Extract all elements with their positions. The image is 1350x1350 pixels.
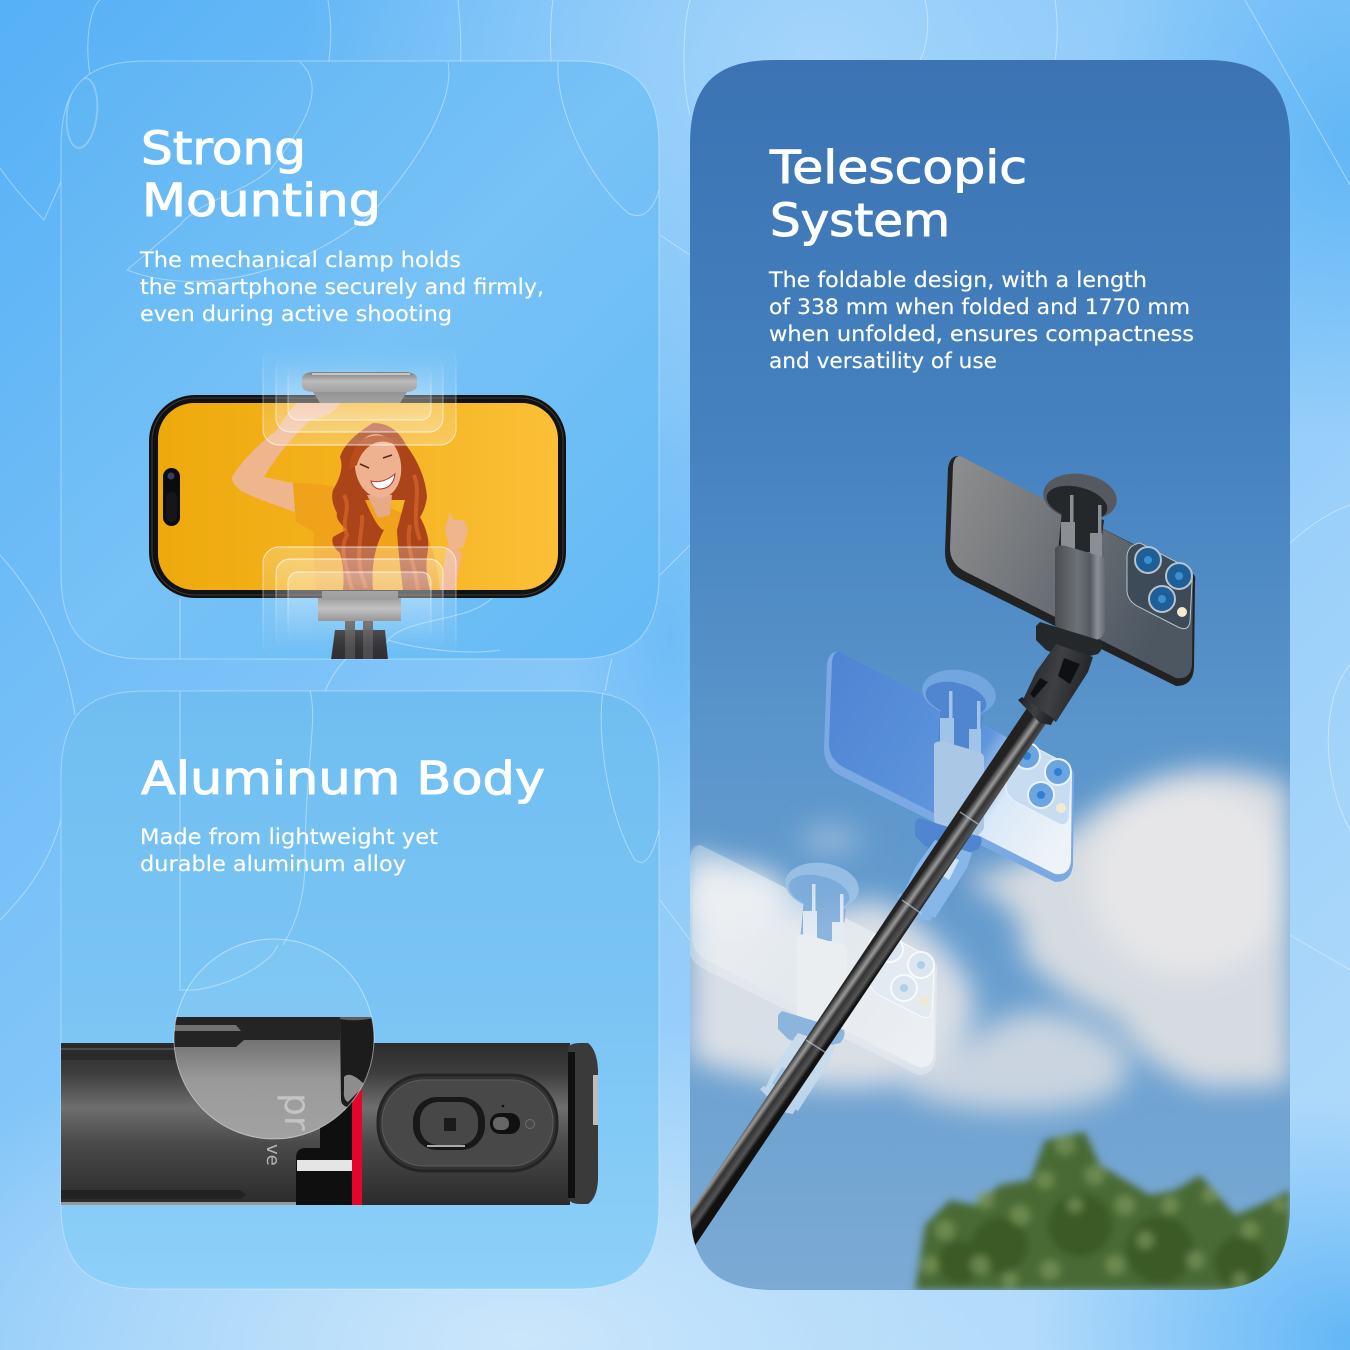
ghost phone: blue, middle position [824,652,1074,921]
description: aluminum body [140,825,438,876]
heading: Strong Mounting [141,122,381,227]
description: strong mounting [139,248,544,326]
description: aluminum body: Made from lightweight yet [140,825,438,849]
power switch [490,1105,534,1134]
handle end cap [568,1043,598,1204]
clouds [680,769,1290,1111]
telescopic pole [690,708,1047,1250]
main phone on clamp [945,456,1195,725]
shutter button [413,1097,485,1150]
heading: Aluminum Body: Aluminum Body [141,752,545,805]
brand text remainder: ve [262,1144,283,1166]
panel: aluminum body [60,691,659,1289]
blurred tree [915,1132,1290,1290]
dynamic island [163,468,180,526]
sky background [690,60,1290,1290]
illustration: phone in clamp [149,345,566,660]
description: telescopic system: of 338 mm when folded and 1770 mm [769,295,1190,319]
description: telescopic system: The foldable design, with a length [768,268,1147,292]
heading: Strong Mounting: Strong [141,122,306,175]
magnifier loupe [170,939,374,1145]
photo: dancing woman [232,403,468,590]
smartphone [149,395,566,598]
heading: Strong Mounting: Mounting [142,174,381,227]
bottom clamp plate [322,591,398,600]
heading: Telescopic System: System [770,194,950,247]
magnifier loupe: pr [276,1093,317,1131]
description: telescopic system: and versatility of use [769,349,997,373]
panel: strong mounting [61,61,659,660]
heading: Telescopic System: Telescopic [769,141,1027,194]
control panel [378,1075,557,1171]
card line pattern [63,62,659,659]
red stripe [352,1090,362,1205]
description: strong mounting: the smartphone securely and firmly, [140,275,544,299]
background line pattern [0,0,1350,970]
top clamp disc [302,372,417,403]
illustration: selfie stick handle [60,939,598,1205]
phone mount stem [318,598,401,660]
description: telescopic system: when unfolded, ensures compactness [769,322,1194,346]
heading: Telescopic System [769,141,1027,247]
description: aluminum body: durable aluminum alloy [140,852,406,876]
rear slot with white strip [296,1100,354,1205]
card line pattern [180,691,659,990]
panel: telescopic system [680,60,1290,1290]
description: strong mounting: even during active shooting [140,302,452,326]
description: strong mounting: The mechanical clamp holds [139,248,461,272]
ghost phone: white, lowest position [687,845,937,1114]
translucent glass highlights: bottom [263,547,456,659]
description: telescopic system [768,268,1194,373]
translucent glass highlights: top [263,345,456,445]
